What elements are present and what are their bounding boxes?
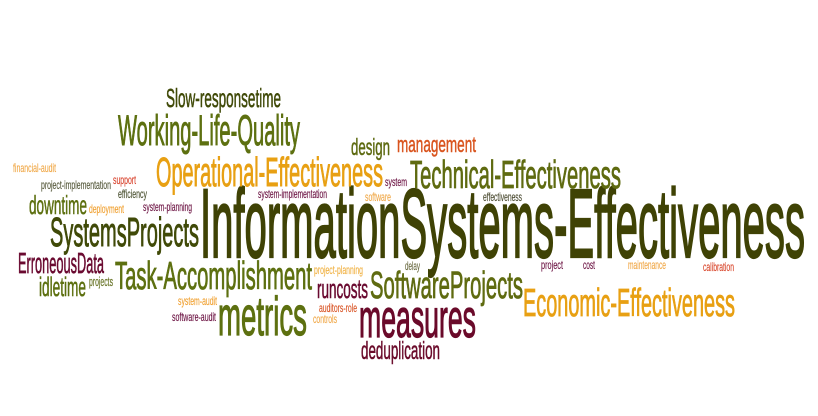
word: management: management	[397, 132, 476, 157]
word: calibration: calibration	[703, 260, 734, 274]
word: auditors-role: auditors-role	[319, 301, 357, 315]
word: support: support	[113, 173, 136, 187]
word: Task-Accomplishment: Task-Accomplishment	[115, 255, 312, 298]
word: system-implementation: system-implementation	[258, 187, 327, 201]
word: projects: projects	[89, 274, 113, 289]
word: maintenance: maintenance	[628, 258, 666, 272]
word: design: design	[351, 134, 390, 160]
word cloud: Working-Life-Quality	[118, 107, 300, 155]
word: efficiency: efficiency	[118, 187, 147, 201]
word: software: software	[365, 190, 391, 204]
word: effectiveness: effectiveness	[483, 190, 522, 204]
word: controls: controls	[313, 312, 337, 326]
word: metrics: metrics	[218, 285, 307, 347]
word: Technical-Effectiveness: Technical-Effectiveness	[410, 154, 621, 197]
word: system: system	[385, 175, 407, 189]
word cloud: measures	[359, 289, 476, 349]
word: delay: delay	[405, 259, 420, 273]
word: financial-audit: financial-audit	[13, 161, 56, 175]
word cloud: runcosts	[317, 274, 368, 304]
word: system-audit: system-audit	[178, 294, 217, 308]
word: Slow-responsetime: Slow-responsetime	[166, 83, 281, 113]
word: SoftwareProjects: SoftwareProjects	[370, 265, 523, 307]
word: project-implementation: project-implementation	[41, 178, 111, 192]
word: project-planning: project-planning	[314, 263, 363, 277]
word cloud: Operational-Effectiveness	[156, 149, 383, 195]
word: downtime: downtime	[29, 190, 87, 220]
word: project: project	[541, 258, 563, 272]
word: idletime: idletime	[39, 272, 86, 302]
word: cost: cost	[583, 258, 595, 272]
word cloud: SystemsProjects	[50, 209, 199, 255]
word: deployment: deployment	[89, 202, 124, 216]
word cloud: ErroneousData	[18, 248, 104, 280]
word: system-planning: system-planning	[143, 200, 192, 214]
word: software-audit: software-audit	[172, 310, 216, 324]
word: deduplication: deduplication	[361, 337, 440, 365]
